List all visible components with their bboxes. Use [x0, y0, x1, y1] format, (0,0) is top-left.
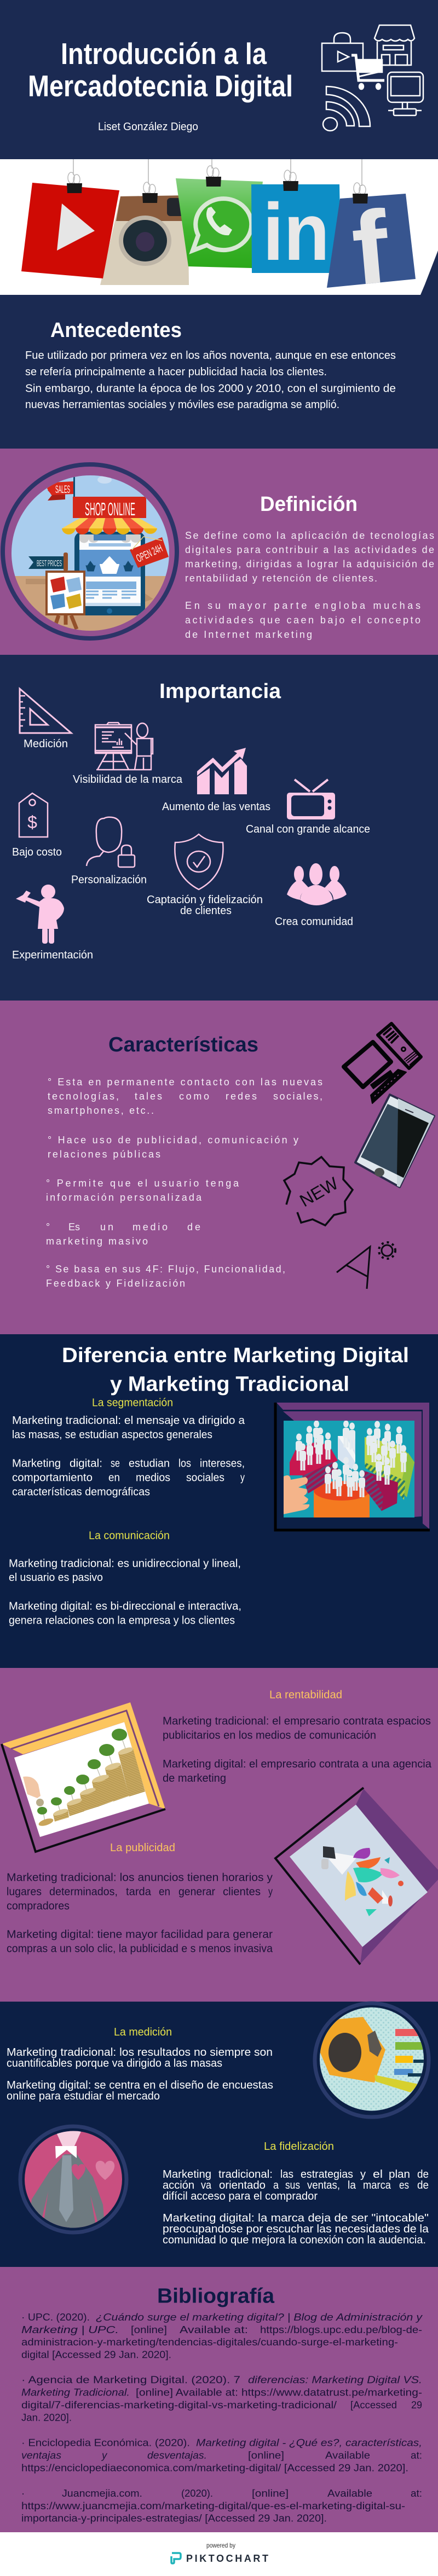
block: la fidelización: ventas, — [307, 2179, 340, 2191]
reference: Juancmejia: (2020). — [181, 2487, 213, 2499]
item: visibilidad de la marca: Visibilidad de la marca — [73, 774, 183, 786]
icon: Facebook card — [327, 194, 416, 288]
reference: UPC: Available at: — [180, 2324, 248, 2335]
text block: list: ° Esta en permanente contacto con las nuevas — [48, 1077, 322, 1088]
reference: Enciclopedia Económica: ventajas — [21, 2450, 61, 2461]
block: la medición: Marketing tradicional: los resultados no siempre son — [7, 2046, 273, 2059]
block: la fidelización: las — [280, 2168, 293, 2180]
icon: letter and gear — [337, 1242, 395, 1289]
text block: Sin embargo, durante la época de los 2000 y 2010, con el surgimiento de — [25, 383, 396, 395]
item: captación y fidelización: Captación y fidelización — [147, 894, 263, 906]
block: la rentabilidad — [163, 1689, 432, 1784]
block: la rentabilidad: Marketing tradicional: el empresario contrata espacios — [163, 1716, 431, 1728]
item: visibilidad de la marca — [73, 723, 183, 786]
reference: Enciclopedia Económica: y — [101, 2450, 108, 2461]
image: coins frame — [2, 1702, 165, 1852]
block: la comunicación: el usuario es pasivo — [9, 1572, 103, 1584]
text block: En su mayor parte engloba muchas — [185, 600, 420, 611]
block: la medición: La medición — [114, 2026, 172, 2038]
item: experimentación: Experimentación — [12, 949, 93, 961]
title — [28, 37, 293, 103]
image: measuring tape circle — [315, 2003, 429, 2117]
block: la publicidad: Marketing tradicional: los anuncios tienen horarios y — [7, 1872, 273, 1884]
block: la fidelización: Marketing — [163, 2168, 211, 2180]
author: Liset González Diego — [98, 121, 198, 133]
block: la segmentación: se — [111, 1457, 120, 1469]
panel: bibliografia — [0, 2267, 438, 2532]
reference: Enciclopedia Económica: desventajas. — [147, 2450, 207, 2461]
reference: Agencia de Marketing Digital — [21, 2374, 422, 2423]
reference: Agencia de Marketing Digital: 29 — [411, 2399, 422, 2410]
block: la fidelización: sus — [285, 2179, 300, 2191]
reference: Enciclopedia Económica: Available — [325, 2450, 370, 2461]
item: canal con grande alcance: Canal con grande alcance — [246, 823, 370, 835]
icon: YouTube card — [21, 183, 119, 278]
block: la segmentación: La segmentación — [92, 1397, 173, 1409]
item: bajo costo — [12, 793, 62, 858]
title: Introducción a la — [61, 37, 267, 71]
block: la fidelización: plan — [389, 2168, 410, 2180]
item: bajo costo: $ — [27, 812, 37, 832]
icon: Instagram card — [100, 195, 189, 285]
item: crea comunidad: Crea comunidad — [275, 916, 353, 928]
block: la publicidad: clientes — [223, 1886, 261, 1898]
heading: Diferencia entre Marketing Digital — [62, 1344, 409, 1367]
text block: list: relaciones públicas — [48, 1149, 160, 1160]
icon: desktop computer — [344, 1024, 421, 1103]
reference: Juancmejia: [online] — [252, 2487, 289, 2499]
block: la rentabilidad: Marketing digital: el empresario contrata a una agencia — [163, 1758, 432, 1770]
block: la fidelización: la — [348, 2179, 356, 2191]
block: la medición — [7, 2026, 273, 2102]
block: la publicidad: en — [159, 1886, 170, 1898]
item: captación y fidelización: de clientes — [180, 905, 232, 917]
title: Mercadotecnia Digital — [28, 69, 293, 103]
icon: smartphone — [355, 1095, 434, 1187]
text block: de Internet marketing — [185, 629, 312, 640]
text block: list: como — [179, 1091, 209, 1102]
block: la publicidad: lugares — [7, 1886, 42, 1898]
block: la fidelización: marca — [363, 2179, 391, 2191]
block: la publicidad: Marketing digital: tiene mayor facilidad para generar — [7, 1929, 273, 1941]
block: la segmentación: estudian — [129, 1457, 170, 1469]
block: la comunicación: La comunicación — [89, 1530, 170, 1542]
item: crea comunidad — [275, 863, 353, 928]
text block: marketing, dirigidas a lograr la adquisición de — [185, 559, 434, 569]
panel: social media photo — [21, 159, 438, 295]
block: la publicidad: La publicidad — [110, 1842, 175, 1854]
panel: rentabilidad y publicidad — [0, 1668, 438, 2002]
block: la fidelización: preocupandose por escuchar las necesidades de la — [163, 2223, 429, 2235]
block: la fidelización: va — [201, 2179, 212, 2191]
block: la fidelización: Marketing digital: la marca deja de ser "intocable" — [163, 2212, 429, 2224]
block: la fidelización: y — [360, 2168, 366, 2180]
block: la fidelización: de — [417, 2179, 429, 2191]
block: la comunicación — [9, 1530, 241, 1627]
item: personalización: Personalización — [71, 874, 147, 886]
panel: footer — [0, 2532, 438, 2576]
reference: UPC: https://blogs.upc.edu.pe/blog-de- — [260, 2324, 422, 2335]
block: la medición: cuantificables porque va dirigido a las masas — [7, 2057, 222, 2069]
panel: diferencia — [0, 1334, 438, 1668]
icon: online shop illustration: BEST PRICES — [37, 559, 62, 568]
panel: medicion y fidelizacion — [0, 2002, 438, 2267]
block: la publicidad — [7, 1842, 273, 1955]
reference: UPC — [21, 2311, 423, 2360]
image: segmentation frame — [275, 1403, 430, 1530]
block: la rentabilidad: La rentabilidad — [269, 1689, 342, 1701]
block: la segmentación: sociales — [186, 1472, 224, 1484]
icon: LinkedIn card: in — [263, 187, 330, 277]
text block: Se define como la aplicación de tecnologías — [185, 530, 434, 541]
block: la segmentación: Marketing tradicional: el mensaje va dirigido a — [12, 1415, 245, 1427]
reference: Juancmejia: Juancmejia.com. — [62, 2487, 142, 2499]
heading: Características — [108, 1033, 258, 1056]
icon: new badge: NEW — [296, 1173, 342, 1211]
block: la rentabilidad: de marketing — [163, 1772, 226, 1784]
reference: Juancmejia: · — [21, 2487, 25, 2499]
reference: Enciclopedia Económica: https://enciclopediaeconomica.com/marketing-digital/ [Accessed 29 Jan. 2020]. — [21, 2462, 408, 2474]
icon: corner wedge — [420, 251, 438, 295]
reference: Agencia de Marketing Digital: Marketing Tradicional. — [21, 2386, 130, 2398]
block: la segmentación: los — [178, 1457, 191, 1469]
text block: list: tales — [135, 1091, 162, 1102]
block: la fidelización: a — [273, 2179, 279, 2191]
block: la segmentación: en — [108, 1472, 120, 1484]
block: la segmentación: intereses, — [200, 1457, 245, 1469]
block: la segmentación: y — [240, 1472, 245, 1484]
block: la fidelización — [163, 2141, 429, 2246]
text block: list: información personalizada — [46, 1192, 202, 1203]
item: aumento de las ventas: Aumento de las ventas — [162, 801, 270, 813]
text block: list: Es — [68, 1222, 80, 1232]
text block: digitales para contribuir a las actividades de — [185, 544, 434, 555]
block: la segmentación: características demográficas — [12, 1486, 150, 1498]
block: la rentabilidad: publicitarios en los medios de comunicación — [163, 1730, 376, 1742]
reference: UPC: [online] — [131, 2324, 167, 2335]
reference: Agencia de Marketing Digital: diferencias: Marketing Digital VS. — [248, 2374, 422, 2385]
icon: new badge — [284, 1157, 353, 1225]
heading: Importancia — [159, 680, 281, 703]
reference: Juancmejia: https://www.juancmejia.com/marketing-digital/que-es-el-marketing-digital-su- — [21, 2500, 405, 2511]
item: experimentación — [12, 885, 93, 961]
block: la medición: Marketing digital: se centra en el diseño de encuestas — [7, 2079, 273, 2091]
block: la fidelización: difícil acceso para el comprador — [163, 2190, 318, 2202]
text block: list: Feedback y Fidelización — [46, 1278, 185, 1289]
text block: list — [46, 1077, 322, 1289]
icon: online shop illustration: OPEN 24H — [135, 542, 164, 565]
text block: actividades que caen bajo el concepto — [185, 615, 420, 626]
text block: list: marketing masivo — [46, 1236, 148, 1247]
reference: UPC: Marketing | UPC. — [21, 2324, 119, 2335]
icon: WhatsApp card — [176, 178, 263, 268]
icon: Facebook card: f — [348, 188, 394, 310]
block: la comunicación: Marketing digital: es bi-direccional e interactiva, — [9, 1601, 241, 1613]
block: la fidelización: tradicional: — [218, 2168, 273, 2180]
reference: Enciclopedia Económica: Marketing digital - ¿Qué es?, características, — [196, 2437, 422, 2449]
reference: UPC: · UPC. (2020). — [21, 2311, 90, 2323]
reference: Agencia de Marketing Digital: [online] Available at: https://www.datatrust.pe/marketing- — [136, 2386, 422, 2398]
block: la medición: online para estudiar el mercado — [7, 2090, 160, 2102]
text block: list: de — [187, 1222, 200, 1232]
powered by label: powered by — [206, 2542, 235, 2549]
item: captación y fidelización — [147, 834, 263, 917]
heading: Antecedentes — [50, 319, 182, 342]
text block: list: tecnologías, — [48, 1091, 119, 1102]
block: la comunicación: genera relaciones con la empresa y los clientes — [9, 1615, 235, 1627]
block: la segmentación: comportamiento — [12, 1472, 93, 1484]
block: la fidelización: La fidelización — [264, 2141, 334, 2153]
icon: digital commerce set — [322, 25, 423, 131]
reference: Enciclopedia Económica — [21, 2437, 422, 2474]
reference: Juancmejia — [21, 2487, 422, 2524]
item: canal con grande alcance — [246, 780, 370, 835]
reference: Agencia de Marketing Digital: · Agencia de Marketing Digital. (2020). 7 — [21, 2374, 240, 2385]
block: la fidelización: comunidad lo que mejora la conexión con la audencia. — [163, 2234, 426, 2246]
text block: list: smartphones, etc.. — [48, 1105, 154, 1116]
heading: Bibliografía — [157, 2284, 275, 2307]
heading — [62, 1344, 409, 1396]
reference: Juancmejia: importancia-y-principales-estrategias/ [Accessed 29 Jan. 2020]. — [21, 2512, 327, 2524]
item: medición: Medición — [24, 738, 68, 750]
reference: UPC: ¿Cuándo surge el marketing digital? | Blog de Administración y — [96, 2311, 423, 2323]
panel: caracteristicas — [0, 1001, 438, 1334]
block: la fidelización: orientado — [219, 2179, 266, 2191]
reference: UPC: administracion-y-marketing/tendencias-digitales/cuando-surge-el-marketing- — [21, 2336, 398, 2348]
text block: list: medio — [132, 1222, 168, 1232]
icon: online shop illustration: SHOP ONLINE — [85, 499, 135, 519]
block: la publicidad: determinados, — [49, 1886, 118, 1898]
panel: antecedentes — [0, 295, 438, 449]
heading: Definición — [260, 493, 358, 516]
reference: Enciclopedia Económica: at: — [411, 2450, 422, 2461]
reference: Agencia de Marketing Digital: digital/7-diferencias-marketing-digital-vs-marketing-tradicional/ — [21, 2399, 337, 2410]
panel: header — [0, 0, 438, 159]
text block: nuevas herramientas sociales y móviles ese paradigma se amplió. — [25, 399, 339, 411]
block: la segmentación: las masas, se estudian aspectos generales — [12, 1429, 212, 1441]
brand name: PIKTOCHART — [186, 2553, 268, 2564]
item: personalización — [71, 817, 147, 886]
block: la publicidad: compras a un solo clic, la publicidad e s menos invasiva — [7, 1943, 273, 1955]
reference: Juancmejia: Available — [327, 2487, 372, 2499]
item: aumento de las ventas — [162, 748, 270, 813]
block: la comunicación: Marketing tradicional: es unidireccional y lineal, — [9, 1558, 241, 1570]
text block: list: un — [100, 1222, 113, 1232]
block: la fidelización: de — [417, 2168, 429, 2180]
item: bajo costo: Bajo costo — [12, 846, 62, 858]
icon: online shop illustration — [0, 464, 177, 638]
reference: UPC: digital [Accessed 29 Jan. 2020]. — [21, 2349, 171, 2360]
block: la segmentación: Marketing — [12, 1457, 61, 1469]
item: medición — [20, 689, 71, 750]
text block: Fue utilizado por primera vez en los años noventa, aunque en ese entonces — [25, 350, 396, 362]
text block: list: sociales, — [273, 1091, 322, 1102]
block: la segmentación: digital: — [70, 1457, 102, 1469]
block: la publicidad: compradores — [7, 1900, 70, 1912]
block: la segmentación: medios — [136, 1472, 170, 1484]
image: megaphone frame — [275, 1788, 438, 1964]
text block: list: redes — [226, 1091, 257, 1102]
reference: Juancmejia: at: — [411, 2487, 422, 2499]
text block: rentabilidad y retención de clientes. — [185, 573, 377, 584]
block: la fidelización: el — [373, 2168, 383, 2180]
block: la fidelización: es — [399, 2179, 409, 2191]
block: la publicidad: generar — [178, 1886, 215, 1898]
text block — [25, 350, 396, 411]
reference: Agencia de Marketing Digital: [Accessed — [350, 2399, 397, 2410]
block: la fidelización: acción — [163, 2179, 194, 2191]
text block: list: ° — [46, 1222, 50, 1232]
reference: Enciclopedia Económica: [online] — [248, 2450, 284, 2461]
block: la publicidad: tarda — [126, 1886, 152, 1898]
icon: Piktochart logo — [171, 2553, 181, 2563]
text block: list: ° Hace uso de publicidad, comunicación y — [48, 1135, 298, 1145]
text block: list: ° Permite que el usuario tenga — [46, 1178, 239, 1189]
panel: definicion — [0, 449, 438, 655]
icon: online shop illustration: SALES — [55, 484, 70, 496]
text block: se refería principalmente a hacer publicidad hacia los clientes. — [25, 366, 327, 378]
text block — [185, 530, 434, 640]
block: la publicidad: y — [268, 1886, 273, 1898]
heading: y Marketing Tradicional — [110, 1373, 349, 1396]
block: la fidelización: estrategias — [301, 2168, 353, 2180]
image: suit with heart circle — [20, 2126, 126, 2232]
text block: list: ° Se basa en sus 4F: Flujo, Funcionalidad, — [46, 1264, 285, 1275]
reference: Agencia de Marketing Digital: Jan. 2020]. — [21, 2411, 72, 2423]
reference: Enciclopedia Económica: · Enciclopedia Económica. (2020). — [21, 2437, 190, 2449]
block: la segmentación — [12, 1397, 245, 1498]
panel: importancia — [0, 655, 438, 1001]
